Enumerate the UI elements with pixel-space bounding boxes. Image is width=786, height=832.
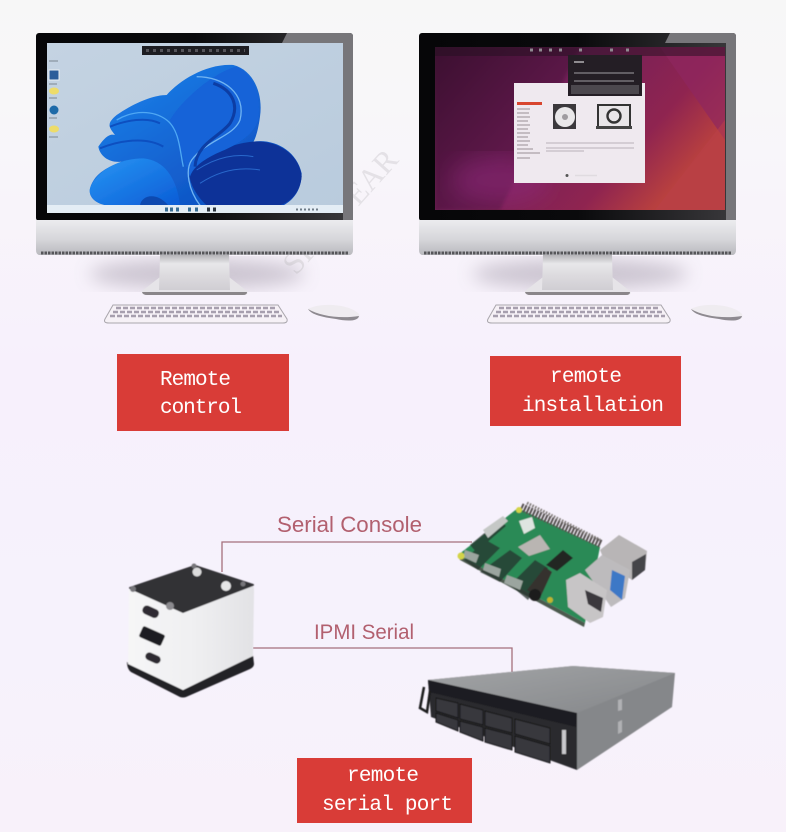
icon: KVM cube device xyxy=(127,564,254,698)
installer window xyxy=(514,83,645,183)
icon: rack server xyxy=(420,666,675,770)
icon: disc xyxy=(553,104,576,129)
connector: IPMI serial xyxy=(253,648,512,672)
icon: Raspberry Pi board xyxy=(458,503,647,627)
panel: remote installation monitor xyxy=(419,33,742,323)
top bar xyxy=(530,48,629,52)
taskbar xyxy=(47,205,343,213)
USB ports xyxy=(585,555,630,607)
label: remote installation: installation xyxy=(522,395,664,418)
label: remote control: Remote xyxy=(160,369,231,392)
remote toolbar xyxy=(142,46,249,55)
label: remote installation: remote xyxy=(550,366,622,389)
ethernet port xyxy=(600,535,647,580)
label: remote serial port xyxy=(297,758,472,823)
label: remote control: control xyxy=(160,397,242,420)
watermark: SPOTPEAR xyxy=(275,142,405,281)
connector: serial console xyxy=(222,542,472,572)
heading: IPMI Serial: IPMI Serial xyxy=(314,621,414,644)
label: remote installation xyxy=(490,356,681,426)
label: remote control xyxy=(117,354,289,431)
icon: laptop with Ubuntu logo xyxy=(596,105,632,129)
screen: Windows desktop xyxy=(47,43,343,213)
dropdown menu xyxy=(568,55,642,96)
label: remote serial port: serial port xyxy=(322,794,453,817)
label: remote serial port: remote xyxy=(347,765,419,788)
desktop icons xyxy=(49,61,59,137)
heading: Serial Console: Serial Console xyxy=(277,512,422,537)
panel: remote control monitor xyxy=(36,33,359,323)
screen: Ubuntu desktop xyxy=(435,47,725,210)
